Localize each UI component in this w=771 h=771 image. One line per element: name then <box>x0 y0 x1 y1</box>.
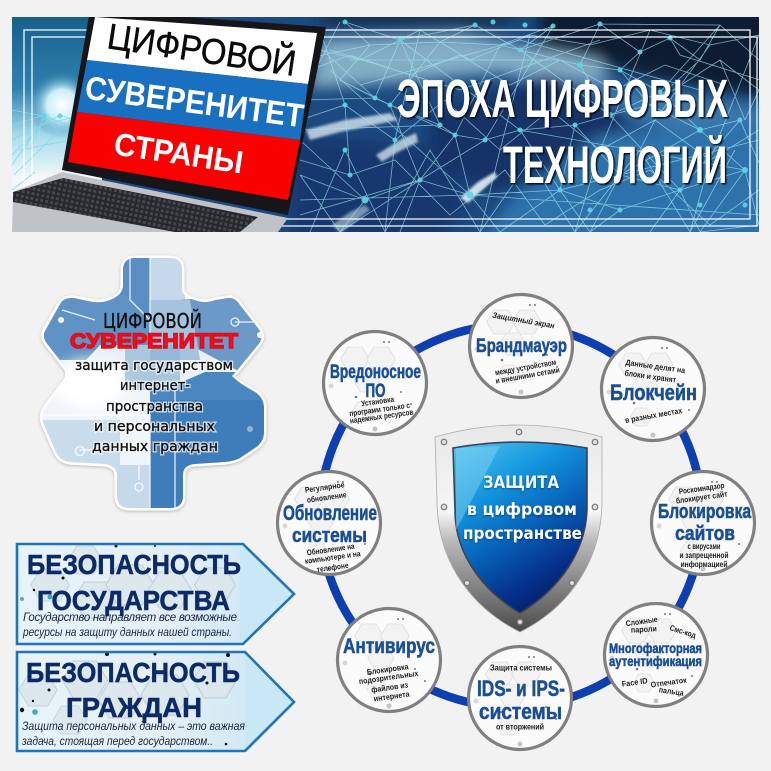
arrow heading <box>26 657 240 723</box>
decorative double frame <box>24 30 757 226</box>
node: site blocking <box>652 472 754 574</box>
node: system update: обновление <box>306 490 348 505</box>
node: system update: телефоне <box>316 561 350 574</box>
node: antivirus: подозрительных <box>358 669 419 686</box>
node: malware: ПО <box>366 381 386 402</box>
gear description: защита государством <box>75 358 233 374</box>
shield text: пространстве <box>463 524 582 544</box>
node: site blocking: блокирует сайт <box>675 489 728 506</box>
node: IDS and IPS systems: системы <box>479 699 562 724</box>
node: malware: Установка <box>361 395 395 408</box>
gear description: и персональных <box>94 419 215 435</box>
node: firewall: Брандмауэр <box>476 336 567 357</box>
node: blockchain: в разных местах <box>624 406 683 425</box>
node: malware <box>324 332 426 434</box>
gear description: пространства <box>106 399 203 415</box>
arrow panel: citizen security <box>17 652 294 751</box>
node: multi-factor authentication <box>604 604 708 706</box>
node: multi-factor authentication: аутентификация <box>609 653 702 669</box>
node: system update: системы <box>292 525 367 547</box>
russian flag screen <box>87 17 317 84</box>
gear description: интернет- <box>120 378 190 394</box>
laptop <box>12 10 326 232</box>
node: system update: Регулярное <box>304 480 346 495</box>
gear title: ЦИФРОВОЙ: ЦИФРОВОЙ <box>103 309 202 333</box>
node: site blocking: сайтов <box>675 523 735 545</box>
node: blockchain: блоки и хранят <box>624 368 677 385</box>
banner <box>12 5 771 240</box>
arrow heading <box>27 549 241 616</box>
arrow description: ресурсы на защиту данных нашей страны. <box>22 627 232 639</box>
gear panel: digital sovereignty <box>40 255 268 510</box>
node: malware: программ только с <box>349 401 411 418</box>
arrow description: задача, стоящая перед государством.. <box>21 736 213 748</box>
node: blockchain: Блокчейн <box>610 380 697 405</box>
node: site blocking: Роскомнадзор <box>678 481 725 496</box>
node: multi-factor authentication: пароли <box>631 624 657 635</box>
node: multi-factor authentication: Face ID <box>621 676 648 689</box>
arrow description <box>22 612 237 639</box>
gear description: интернет- <box>120 378 190 394</box>
node: blockchain <box>602 338 704 440</box>
node: multi-factor authentication: Сложные <box>625 615 659 628</box>
node: firewall: и внешними сетами <box>495 365 560 386</box>
node: malware: Вредоносное <box>330 362 421 383</box>
node: IDS and IPS systems: Защита системы <box>490 664 552 672</box>
node: IDS and IPS systems: IDS- и IPS- <box>477 676 565 701</box>
network nodes <box>42 20 748 212</box>
shield rivets <box>441 429 598 625</box>
node: system update: Обновление <box>283 502 377 525</box>
arrow heading: ГРАЖДАН <box>66 692 202 723</box>
node: multi-factor authentication: Многофакторная <box>609 640 702 656</box>
node: system update <box>278 472 380 574</box>
node: IDS and IPS systems: от вторжений <box>496 722 544 732</box>
gear description: данных граждан <box>92 439 218 455</box>
laptop bezel <box>62 10 326 215</box>
gear description: данных граждан <box>92 439 218 455</box>
node: firewall: Защитный экран <box>492 311 555 330</box>
gear description: пространства <box>106 399 203 415</box>
node: multi-factor authentication: Отпечаток <box>650 675 688 689</box>
node: site blocking: и запрещенной <box>680 551 729 560</box>
node: multi-factor authentication: пальца <box>658 685 685 698</box>
arrow panel: state security <box>17 544 294 644</box>
node: antivirus <box>338 608 440 712</box>
shield text <box>463 473 582 544</box>
arrow description: Государство направляет все возможные <box>23 612 237 624</box>
node: antivirus: файлов из <box>371 680 409 695</box>
left glow <box>12 17 102 232</box>
shield text: в цифровом <box>467 500 577 520</box>
gear description <box>75 358 233 455</box>
node: blockchain: Данные делят на <box>625 358 686 375</box>
arrow heading: БЕЗОПАСНОСТЬ <box>27 549 241 580</box>
arrow heading: БЕЗОПАСНОСТЬ <box>26 657 240 688</box>
shield text: ЗАЩИТА <box>483 473 560 493</box>
laptop base <box>12 172 288 232</box>
gear description: защита государством <box>75 358 233 374</box>
screen text: ЦИФРОВОЙ: ЦИФРОВОЙ <box>105 14 299 84</box>
arrow description: Защита персональных данных – это важная <box>22 721 245 733</box>
arrow heading: ГОСУДАРСТВА <box>37 585 230 616</box>
node: malware: надежных ресурсов <box>349 408 414 425</box>
node: IDS and IPS systems <box>468 646 572 750</box>
node: site blocking: информацией <box>680 560 728 569</box>
node: antivirus: Блокировка <box>366 662 410 677</box>
network lines <box>300 22 760 232</box>
gear description: и персональных <box>94 419 215 435</box>
node: system update: компьютере и на <box>304 549 361 566</box>
node: antivirus: интернета <box>373 689 411 703</box>
node: system update: Обновление на <box>306 542 355 557</box>
shield <box>435 425 602 632</box>
node: firewall <box>470 294 572 398</box>
gear title: СУВЕРЕНИТЕТ: СУВЕРЕНИТЕТ <box>70 330 238 353</box>
node: antivirus: Антивирус <box>343 635 435 658</box>
banner title <box>398 79 730 186</box>
node: site blocking: с вирусами <box>688 542 721 551</box>
blue ring connector <box>320 325 702 707</box>
screen text: СТРАНЫ: СТРАНЫ <box>112 126 246 181</box>
screen text: СУВЕРЕНИТЕТ: СУВЕРЕНИТЕТ <box>83 69 306 134</box>
node: multi-factor authentication: Смс-код <box>669 623 697 640</box>
node: firewall: между устройством <box>494 358 557 377</box>
arrow description <box>21 721 245 748</box>
